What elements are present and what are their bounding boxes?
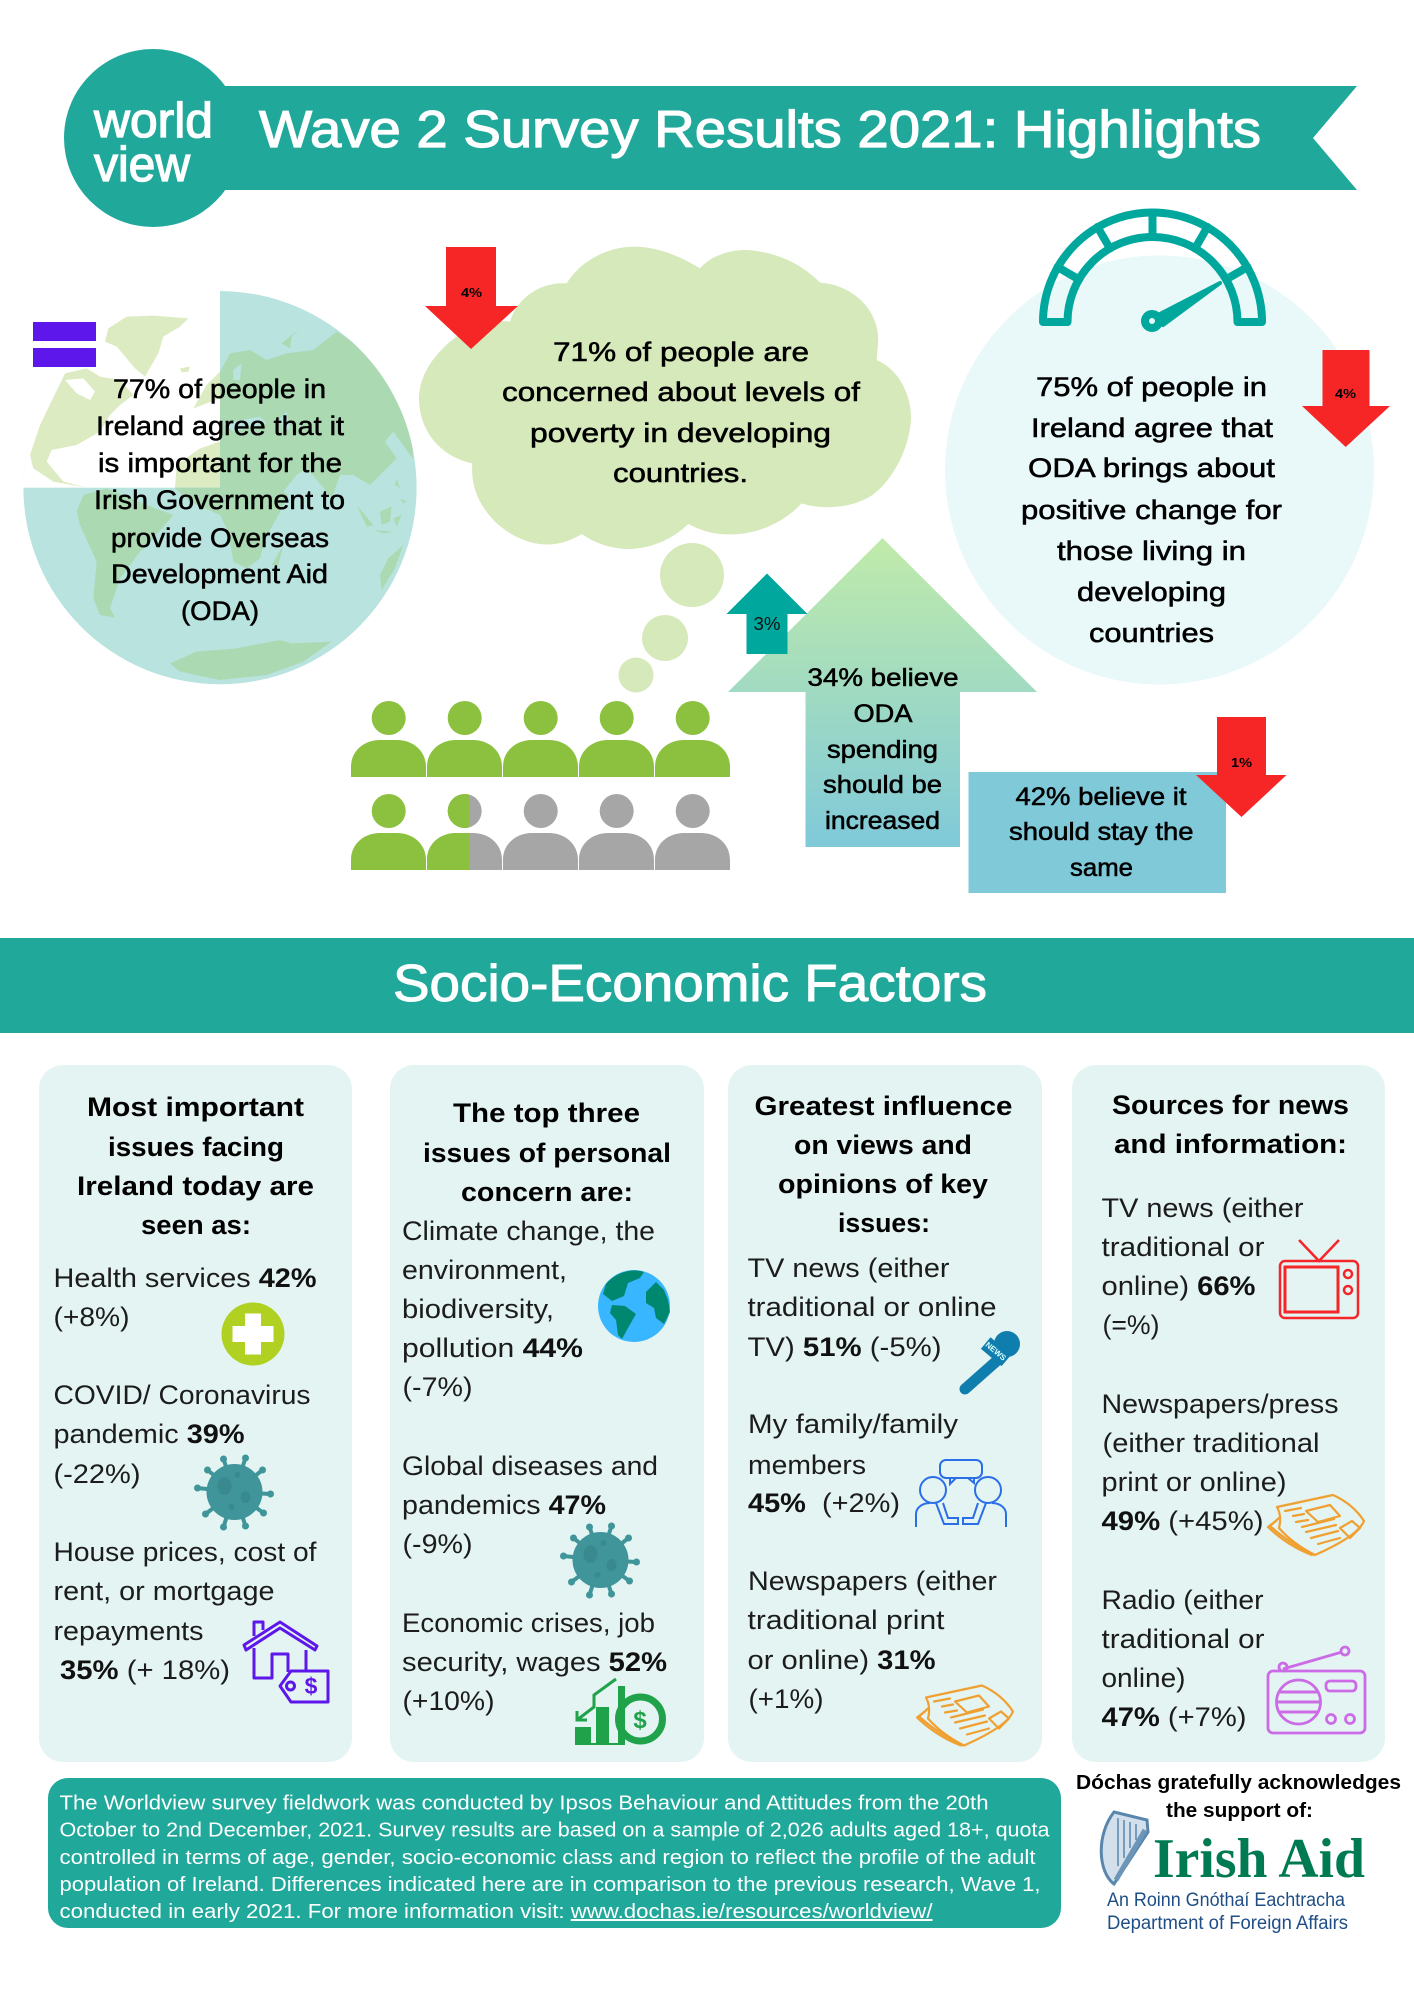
footer methodology note: The Worldview survey fieldwork was conducted by Ipsos Behaviour and Attitudes from the 20th xyxy=(60,1792,988,1814)
heading: concern are: xyxy=(461,1177,633,1207)
text: 75% agree: countries xyxy=(1089,618,1214,648)
footer methodology note: population of Ireland. Differences indicated here are in comparison to the previous research, Wave 1, xyxy=(60,1874,1040,1896)
text: 42% believe: should stay the xyxy=(1009,818,1194,846)
arrow: up 3%: 3% xyxy=(754,614,780,634)
text: 75% agree: positive change for xyxy=(1021,495,1282,525)
item: climate: environment, xyxy=(402,1255,567,1285)
icon: medical cross xyxy=(222,1302,284,1366)
item: newspapers: traditional print xyxy=(748,1605,945,1635)
text: 75% agree: 75% of people in xyxy=(1036,372,1267,402)
text: 77% agree: Development Aid xyxy=(111,559,328,589)
item: global diseases xyxy=(402,1451,658,1559)
item: tv news: TV news (either xyxy=(1102,1193,1304,1223)
arrow: down 4%: 4% xyxy=(1335,386,1356,401)
item: newspapers press: 49% (+45%) xyxy=(1102,1506,1264,1536)
item: newspapers press: print or online) xyxy=(1102,1467,1286,1497)
arrow: down 1% xyxy=(1196,717,1286,817)
worldview logo xyxy=(64,49,242,227)
item: radio: online) xyxy=(1102,1663,1186,1693)
worldview logo: world xyxy=(93,94,213,148)
text: 77% agree: provide Overseas xyxy=(111,523,329,553)
thought bubbles xyxy=(618,543,724,692)
big up arrow xyxy=(728,538,1037,847)
heading xyxy=(423,1098,671,1207)
item: family: My family/family xyxy=(748,1409,959,1439)
text: 42% believe: 42% believe it xyxy=(1016,783,1187,811)
header banner xyxy=(64,49,1357,227)
icon: chart and coin: $ xyxy=(633,1707,647,1734)
acknowledgement text: the support of: xyxy=(1166,1800,1313,1822)
item: climate xyxy=(402,1216,655,1402)
icon: people talking xyxy=(916,1460,1006,1527)
footer methodology note: October to 2nd December, 2021. Survey results are based on a sample of 2,026 adults aged 18+, quota xyxy=(60,1820,1050,1842)
section band: Socio-Economic Factors: Socio-Economic Factors xyxy=(393,955,987,1013)
arrow: down 4% xyxy=(1302,350,1390,447)
item: economic crises: (+10%) xyxy=(402,1686,494,1716)
item: tv news: TV) 51% (-5%) xyxy=(748,1332,942,1362)
heading: issues of personal xyxy=(423,1138,671,1168)
icon: news microphone xyxy=(965,1331,1020,1389)
item: health services: (+8%) xyxy=(54,1302,130,1332)
title: Wave 2 Survey Results 2021: Highlights xyxy=(259,101,1261,159)
department name xyxy=(1107,1890,1348,1934)
item: covid xyxy=(54,1380,310,1489)
arrow: up 3% xyxy=(726,574,808,654)
blue box xyxy=(968,772,1226,893)
text: 71% concerned: 71% of people are xyxy=(553,337,809,367)
icon: virus xyxy=(194,1454,274,1530)
item: climate: Climate change, the xyxy=(402,1216,655,1246)
item: global diseases: pandemics 47% xyxy=(402,1490,606,1520)
item: newspapers press xyxy=(1102,1389,1338,1536)
text: 75% agree: developing xyxy=(1077,577,1226,607)
text: 34% believe: increased xyxy=(825,807,940,835)
item: radio xyxy=(1102,1585,1264,1732)
panel: globe 77% xyxy=(20,285,417,684)
item: house prices: repayments xyxy=(54,1616,204,1646)
item: health services: Health services 42% xyxy=(54,1263,316,1293)
text: 34% believe: 34% believe xyxy=(808,664,958,692)
panel: thought cloud 71% xyxy=(419,247,911,692)
item: tv news: (=%) xyxy=(1102,1310,1160,1340)
item: climate: pollution 44% xyxy=(402,1333,583,1363)
item: health services xyxy=(54,1263,316,1332)
heading: Sources for news xyxy=(1112,1090,1349,1120)
item: tv news xyxy=(1102,1193,1304,1340)
item: economic crises xyxy=(402,1608,667,1716)
item: tv news: online) 66% xyxy=(1102,1271,1256,1301)
footer methodology note: conducted in early 2021. For more information visit: www.dochas.ie/resources/worldview/ xyxy=(60,1901,933,1923)
text: 34% believe: should be xyxy=(823,771,942,799)
text: 71% concerned xyxy=(502,337,861,488)
item: covid: COVID/ Coronavirus xyxy=(54,1380,310,1410)
section band: Socio-Economic Factors xyxy=(0,938,1414,1033)
heading: Ireland today are xyxy=(77,1171,314,1201)
item: house prices: rent, or mortgage xyxy=(54,1576,274,1606)
text: 34% believe: spending xyxy=(827,736,938,764)
icon: speedometer xyxy=(1043,212,1262,328)
pale circle xyxy=(945,256,1374,684)
heading: The top three xyxy=(453,1098,640,1128)
arrow: down 4%: 4% xyxy=(461,285,482,300)
panel: greatest influence xyxy=(728,1065,1042,1762)
item: family xyxy=(748,1409,959,1518)
icon: news microphone: NEWS xyxy=(984,1340,1008,1363)
item: newspapers press: (either traditional xyxy=(1102,1428,1320,1458)
item: house prices: 35% (+ 18%) xyxy=(60,1655,230,1685)
item: family: 45% (+2%) xyxy=(748,1488,900,1518)
item: family: members xyxy=(748,1450,866,1480)
item: newspapers xyxy=(748,1566,997,1714)
item: global diseases: (-9%) xyxy=(402,1529,472,1559)
text: 77% agree: 77% of people in xyxy=(113,374,326,404)
item: radio: traditional or xyxy=(1102,1624,1264,1654)
icon: harp xyxy=(1101,1812,1148,1884)
ribbon xyxy=(190,86,1357,190)
acknowledgement text xyxy=(1076,1772,1401,1822)
card background xyxy=(1072,1065,1385,1762)
card background xyxy=(390,1065,704,1762)
heading: issues facing xyxy=(108,1132,284,1162)
card background xyxy=(39,1065,352,1762)
item: tv news: traditional or online xyxy=(748,1292,996,1322)
icon: virus xyxy=(560,1522,640,1598)
icon grid: people 71% xyxy=(351,701,730,870)
panel: arrow 34% increased xyxy=(726,538,1037,847)
item: radio: Radio (either xyxy=(1102,1585,1264,1615)
footer methodology note: controlled in terms of age, gender, socio-economic class and region to reflect the profile of the adult xyxy=(60,1847,1036,1869)
item: climate: (-7%) xyxy=(402,1372,472,1402)
item: tv news: TV news (either xyxy=(748,1253,950,1283)
item: economic crises: Economic crises, job xyxy=(402,1608,655,1638)
text: 71% concerned: concerned about levels of xyxy=(502,377,861,407)
icon: radio xyxy=(1268,1647,1365,1733)
item: tv news: traditional or xyxy=(1102,1232,1264,1262)
department name: Department of Foreign Affairs xyxy=(1107,1913,1348,1934)
panel: sources for news xyxy=(1072,1065,1385,1762)
item: newspapers: Newspapers (either xyxy=(748,1566,997,1596)
icon: chart and coin xyxy=(575,1679,662,1745)
heading xyxy=(77,1092,314,1240)
text: 71% concerned: poverty in developing xyxy=(530,418,831,448)
panel: gauge 75% xyxy=(945,212,1390,684)
arrow: down 4% xyxy=(425,247,518,349)
text: 77% agree: is important for the xyxy=(98,448,342,478)
heading: opinions of key xyxy=(778,1169,988,1199)
icon: newspaper xyxy=(917,1686,1013,1746)
text: 42% believe: same xyxy=(1070,854,1133,882)
heading: issues: xyxy=(838,1208,930,1238)
arrow: down 1%: 1% xyxy=(1231,755,1252,770)
panel: top three issues xyxy=(390,1065,704,1762)
icon: house with price tag xyxy=(244,1622,328,1702)
item: radio: 47% (+7%) xyxy=(1102,1702,1246,1732)
item: climate: biodiversity, xyxy=(402,1294,554,1324)
row of green and grey people xyxy=(351,794,730,870)
department name: An Roinn Gnóthaí Eachtracha xyxy=(1107,1890,1345,1911)
item: newspapers press: Newspapers/press xyxy=(1102,1389,1338,1419)
item: global diseases: Global diseases and xyxy=(402,1451,658,1481)
globe illustration xyxy=(20,285,417,684)
cloud shape xyxy=(419,247,911,549)
text: 42% believe xyxy=(1009,783,1194,882)
text: 77% agree: (ODA) xyxy=(181,596,259,626)
text: 71% concerned: countries. xyxy=(613,458,748,488)
item: house prices: House prices, cost of xyxy=(54,1537,317,1567)
item: newspapers: (+1%) xyxy=(748,1684,824,1714)
heading: on views and xyxy=(794,1130,972,1160)
Irish Aid wordmark: Irish Aid xyxy=(1153,1828,1365,1890)
item: newspapers: or online) 31% xyxy=(748,1645,936,1675)
worldview logo: view xyxy=(94,138,191,192)
heading: Greatest influence xyxy=(754,1091,1012,1121)
heading xyxy=(1112,1090,1349,1159)
text: 75% agree: Ireland agree that xyxy=(1031,413,1274,443)
heading: and information: xyxy=(1114,1129,1347,1159)
panel: most important issues xyxy=(39,1065,352,1762)
footer methodology note xyxy=(48,1778,1061,1928)
card background xyxy=(728,1065,1042,1762)
text: 34% believe: ODA xyxy=(854,700,913,728)
row of green people xyxy=(351,701,730,777)
heading xyxy=(754,1091,1012,1238)
item: covid: pandemic 39% xyxy=(54,1419,244,1449)
item: economic crises: security, wages 52% xyxy=(402,1647,667,1677)
text: 77% agree: Ireland agree that it xyxy=(96,411,345,441)
text: 75% agree: those living in xyxy=(1057,536,1246,566)
item: covid: (-22%) xyxy=(54,1459,140,1489)
icon: television xyxy=(1280,1240,1358,1318)
icon: house with price tag: $ xyxy=(305,1673,318,1699)
text: 75% agree: ODA brings about xyxy=(1028,453,1276,483)
icon: earth xyxy=(598,1270,670,1342)
text: 77% agree: Irish Government to xyxy=(94,485,345,515)
acknowledgement text: Dóchas gratefully acknowledges xyxy=(1076,1772,1401,1794)
text: 77% agree xyxy=(94,374,345,626)
text: 75% agree xyxy=(1021,372,1282,648)
text: 34% believe xyxy=(808,664,958,835)
icon: equals no change xyxy=(33,322,96,367)
item: tv news xyxy=(748,1253,996,1362)
panel: box 42% same xyxy=(968,717,1286,893)
item: house prices xyxy=(54,1537,317,1685)
heading: seen as: xyxy=(141,1210,251,1240)
icon: newspaper xyxy=(1268,1495,1364,1555)
acknowledgement and Irish Aid logo xyxy=(1076,1772,1401,1934)
heading: Most important xyxy=(87,1092,304,1122)
